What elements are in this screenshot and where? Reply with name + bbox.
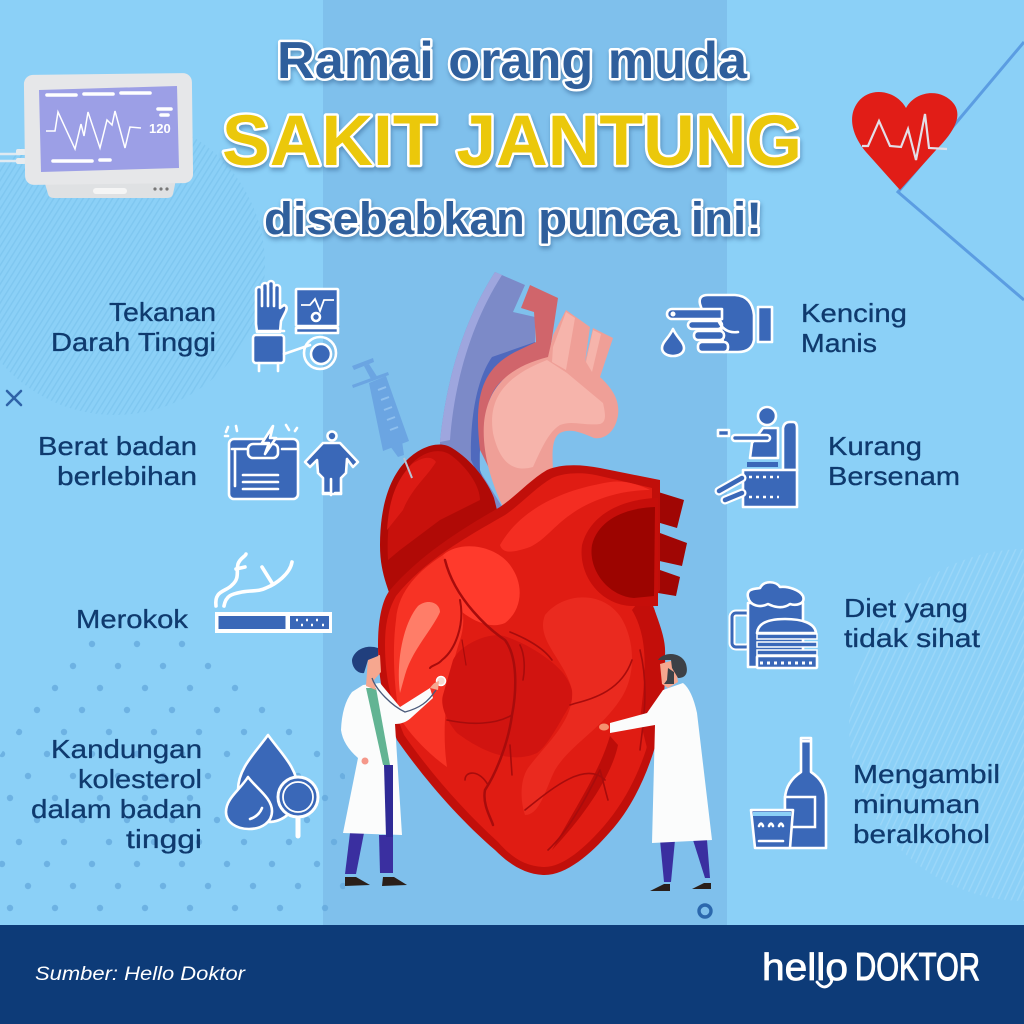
icon: patient monitor xyxy=(0,73,193,198)
aorta body xyxy=(484,310,618,507)
decorative ring xyxy=(699,905,711,917)
decorative cross mark xyxy=(7,391,21,405)
light patches xyxy=(443,546,520,625)
label: Kencing Manis: Manis xyxy=(801,328,877,358)
label: Mengambil minuman beralkohol: Mengambil xyxy=(853,759,1000,789)
label: Kurang Bersenam: Kurang xyxy=(828,431,922,461)
label: Kencing Manis xyxy=(801,298,907,358)
heart xyxy=(378,444,687,875)
icon: lack of exercise xyxy=(718,407,797,507)
legs xyxy=(345,833,364,874)
label: Tekanan Darah Tinggi: Darah Tinggi xyxy=(51,327,216,357)
coronary veins xyxy=(430,560,645,850)
label: Berat badan berlebihan: berlebihan xyxy=(57,461,197,491)
hand on pocket xyxy=(362,758,368,764)
dark centre xyxy=(442,635,572,757)
source text: Sumber: Hello Doktor xyxy=(35,963,247,985)
label: Merokok: Merokok xyxy=(76,604,189,634)
icon: high blood pressure xyxy=(253,281,338,371)
right shade xyxy=(632,600,663,760)
head xyxy=(660,660,678,688)
icon: overweight xyxy=(225,425,358,499)
label: Mengambil minuman beralkohol: beralkohol xyxy=(853,819,990,849)
icon: heart with pulse xyxy=(852,92,957,190)
main body outline xyxy=(378,465,665,875)
label: Kurang Bersenam: Bersenam xyxy=(828,461,960,491)
title xyxy=(222,32,802,244)
label: Tekanan Darah Tinggi xyxy=(51,297,216,357)
left atrium xyxy=(380,444,520,600)
coat xyxy=(341,683,433,835)
logo: hello DOKTOR: DOKTOR xyxy=(855,946,980,989)
hand xyxy=(599,724,609,730)
title: Ramai orang muda xyxy=(277,32,748,90)
logo: hello DOKTOR xyxy=(762,946,980,989)
label: Diet yang tidak sihat: tidak sihat xyxy=(844,623,981,653)
label: Tekanan Darah Tinggi: Tekanan xyxy=(109,297,216,327)
label: Berat badan berlebihan: Berat badan xyxy=(38,431,197,461)
label: Kandungan kolesterol dalam badan tinggi: tinggi xyxy=(126,824,202,854)
doctor right xyxy=(599,654,712,891)
label: Diet yang tidak sihat xyxy=(844,593,981,653)
label: Kencing Manis: Kencing xyxy=(801,298,907,328)
syringe xyxy=(352,358,409,457)
logo: hello DOKTOR: hello xyxy=(762,947,848,989)
label: Kandungan kolesterol dalam badan tinggi: dalam badan xyxy=(31,794,202,824)
icon: diabetes hand xyxy=(662,295,772,356)
icon: cigarette xyxy=(215,554,332,633)
label: Diet yang tidak sihat: Diet yang xyxy=(844,593,968,623)
right oval xyxy=(582,498,658,606)
icon: patient monitor: 120 xyxy=(149,121,171,136)
right light band xyxy=(522,597,632,815)
shoes xyxy=(650,884,670,891)
label: Mengambil minuman beralkohol: minuman xyxy=(853,789,980,819)
footer band xyxy=(0,925,1024,1024)
doctor left xyxy=(341,647,446,886)
label: Kandungan kolesterol dalam badan tinggi xyxy=(31,734,202,854)
icon: cholesterol drops xyxy=(226,735,318,836)
label: Berat badan berlebihan xyxy=(38,431,197,491)
title: disebabkan punca ini! xyxy=(264,193,762,244)
label: Mengambil minuman beralkohol xyxy=(853,759,1000,849)
stethoscope xyxy=(372,678,436,712)
vein xyxy=(440,272,535,513)
head xyxy=(366,655,381,690)
aorta and vessels xyxy=(440,272,618,513)
icon: alcohol xyxy=(751,738,826,848)
label: Kandungan kolesterol dalam badan tinggi: kolesterol xyxy=(78,764,202,794)
coat xyxy=(610,683,712,843)
stubs xyxy=(650,491,687,596)
artery xyxy=(478,285,558,470)
label: Kandungan kolesterol dalam badan tinggi: Kandungan xyxy=(51,734,202,764)
icon: unhealthy diet xyxy=(732,582,817,668)
legs xyxy=(660,840,675,882)
title: SAKIT JANTUNG xyxy=(222,102,802,181)
label: Kurang Bersenam xyxy=(828,431,960,491)
shoes xyxy=(345,877,370,886)
